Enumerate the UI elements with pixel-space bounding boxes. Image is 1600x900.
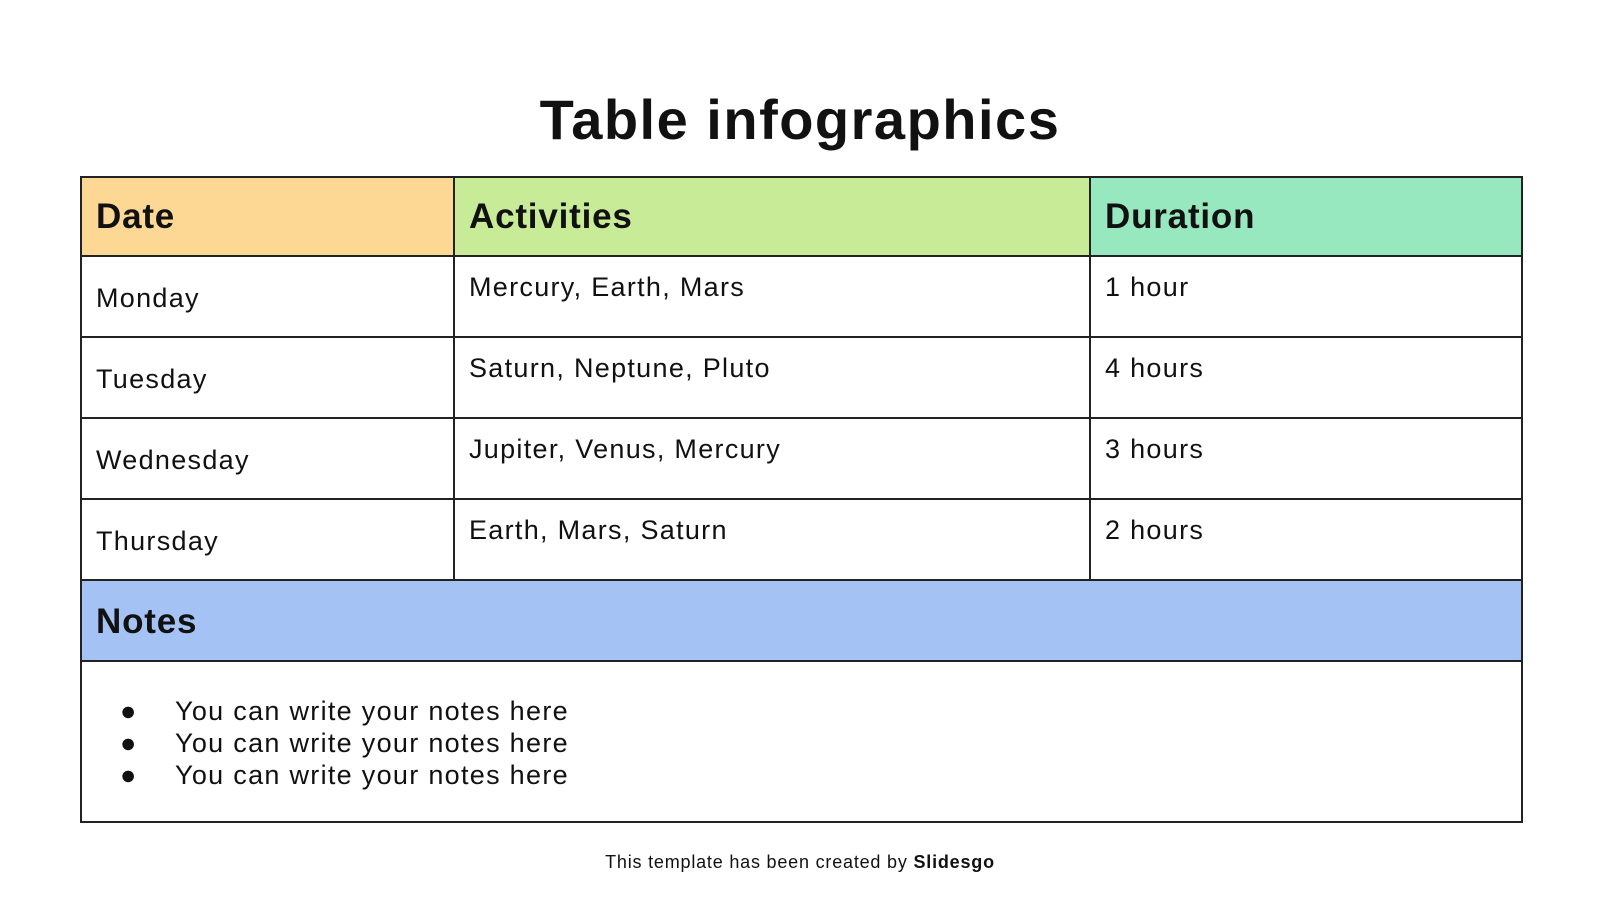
notes body: ● bbox=[120, 728, 138, 758]
notes body: ● bbox=[120, 696, 138, 726]
header: date bbox=[80, 176, 455, 257]
footer: This template has been created by Slidesgo bbox=[605, 852, 995, 872]
notes body bbox=[80, 660, 1523, 823]
notes header bbox=[80, 579, 1523, 662]
row: monday: 1 hour bbox=[1105, 272, 1189, 302]
row: monday: Mercury, Earth, Mars bbox=[469, 272, 745, 302]
notes body: You can write your notes here bbox=[175, 696, 569, 726]
row: monday: Monday bbox=[96, 283, 200, 313]
title: Table infographics bbox=[540, 88, 1060, 151]
notes body: You can write your notes here bbox=[175, 760, 569, 790]
row: tuesday: Saturn, Neptune, Pluto bbox=[469, 353, 771, 383]
row: wednesday bbox=[80, 419, 1523, 498]
notes body: ● bbox=[120, 760, 138, 790]
row: monday bbox=[80, 257, 1523, 336]
notes body: You can write your notes here bbox=[175, 728, 569, 758]
header: activities bbox=[453, 176, 1091, 257]
header: activities: Activities bbox=[469, 197, 633, 236]
table bbox=[80, 176, 1523, 823]
header: date: Date bbox=[96, 197, 175, 236]
header: duration: Duration bbox=[1105, 197, 1255, 236]
notes header: Notes bbox=[96, 602, 197, 641]
header: duration bbox=[1089, 176, 1523, 257]
row: tuesday: Tuesday bbox=[96, 364, 208, 394]
row: thursday: Earth, Mars, Saturn bbox=[469, 515, 728, 545]
row: thursday bbox=[80, 500, 1523, 579]
row: wednesday: Jupiter, Venus, Mercury bbox=[469, 434, 781, 464]
row: tuesday bbox=[80, 338, 1523, 417]
row: thursday: Thursday bbox=[96, 526, 219, 556]
row: thursday: 2 hours bbox=[1105, 515, 1204, 545]
row: wednesday: Wednesday bbox=[96, 445, 250, 475]
row: tuesday: 4 hours bbox=[1105, 353, 1204, 383]
row: wednesday: 3 hours bbox=[1105, 434, 1204, 464]
